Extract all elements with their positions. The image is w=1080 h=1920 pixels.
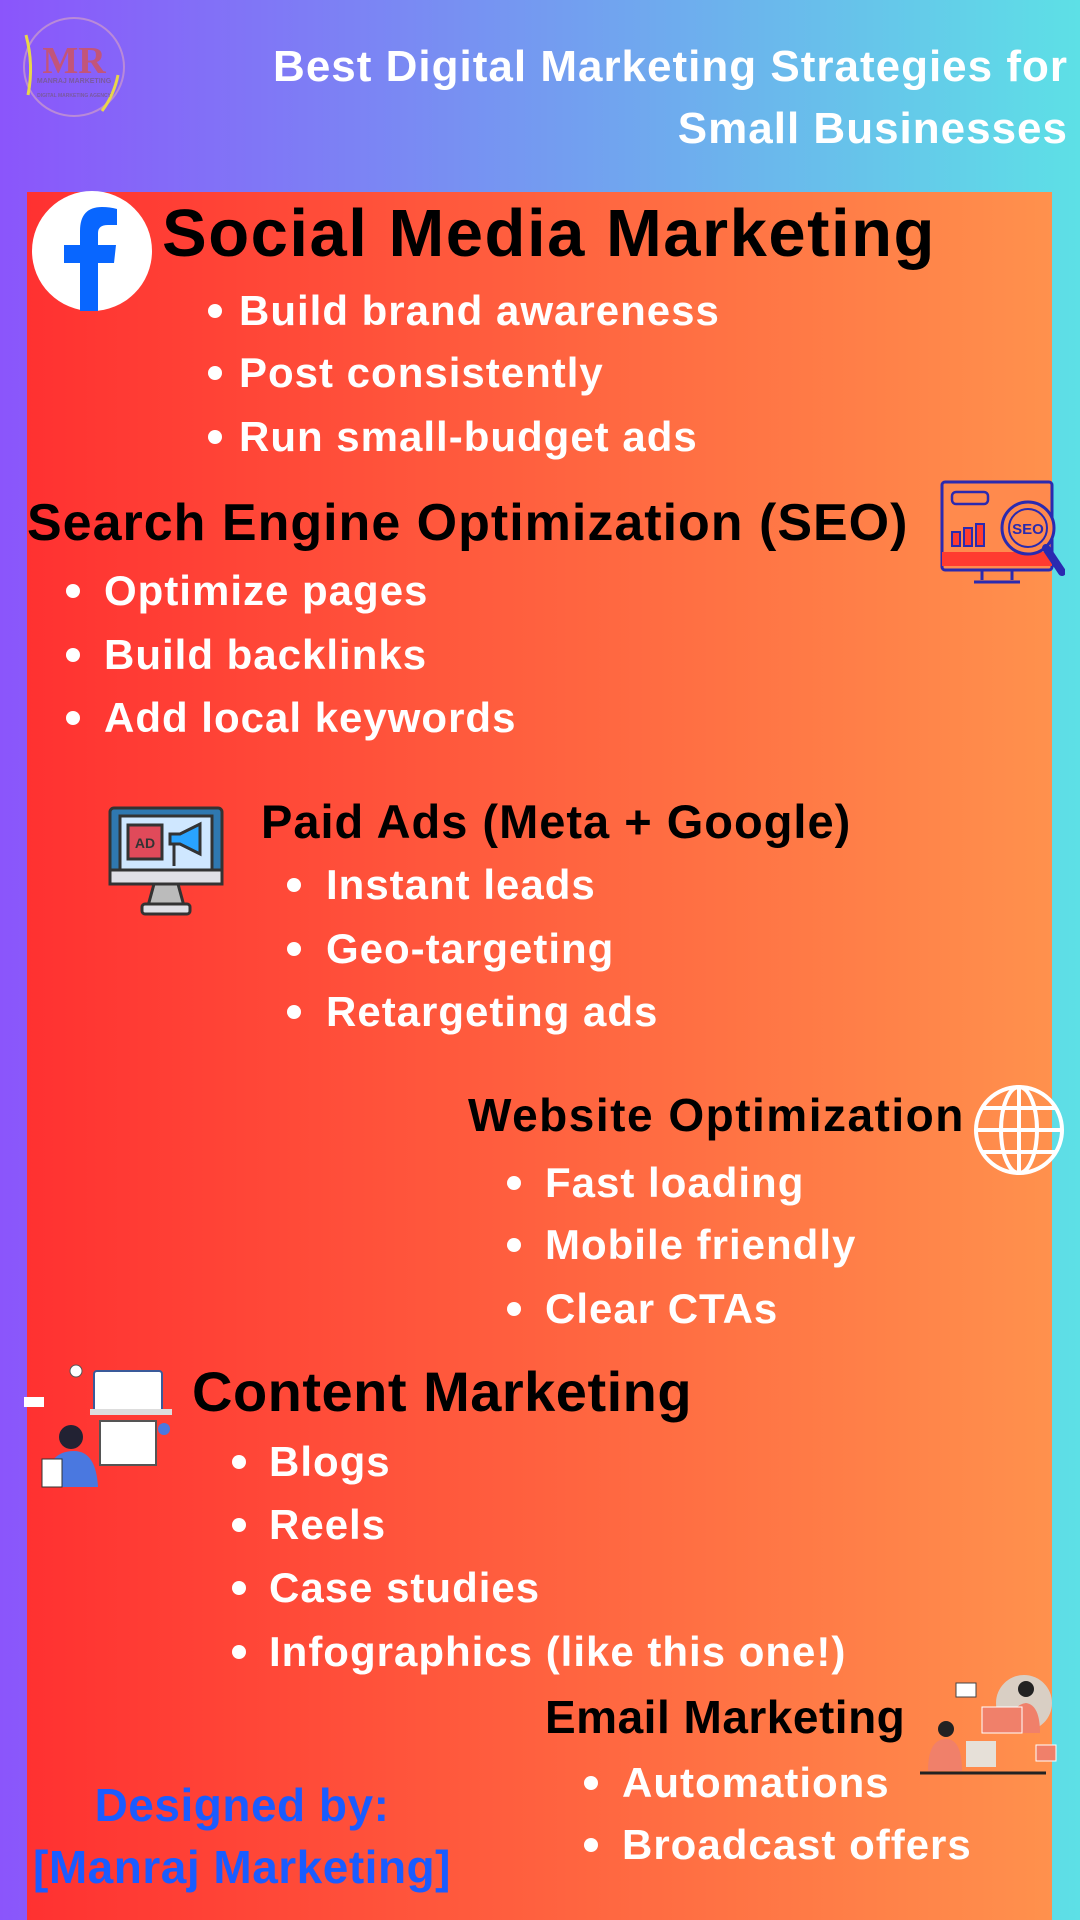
- list: content: Blogs: [269, 1438, 391, 1485]
- list: social media: Run small-budget ads: [239, 413, 698, 460]
- list: website: Mobile friendly: [545, 1221, 856, 1268]
- logo: DIGITAL MARKETING AGENCY: [37, 93, 112, 99]
- list: content: [232, 1438, 846, 1675]
- title: Small Businesses: [678, 104, 1068, 153]
- logo: MANRAJ MARKETING: [37, 78, 112, 85]
- list: email: Automations: [622, 1759, 890, 1806]
- heading: paid ads: Paid Ads (Meta + Google): [261, 795, 851, 848]
- list: email: [584, 1759, 972, 1868]
- list: SEO: Add local keywords: [104, 694, 516, 741]
- list: SEO: [66, 567, 516, 741]
- title: [273, 42, 1068, 153]
- list: content: Infographics (like this one!): [269, 1628, 846, 1675]
- icon: ad monitor: AD: [135, 835, 155, 851]
- icon: facebook: [32, 191, 152, 311]
- list: social media: [208, 287, 720, 460]
- list: paid ads: [287, 861, 658, 1035]
- logo: [23, 17, 125, 117]
- list: website: Clear CTAs: [545, 1285, 778, 1332]
- heading: social media marketing: Social Media Marketing: [162, 196, 936, 271]
- icon: SEO monitor: [940, 480, 1065, 584]
- list: paid ads: Retargeting ads: [326, 988, 658, 1035]
- list: SEO: Optimize pages: [104, 567, 428, 614]
- list: paid ads: Geo-targeting: [326, 925, 614, 972]
- list: content: Case studies: [269, 1564, 540, 1611]
- list: paid ads: Instant leads: [326, 861, 596, 908]
- logo: MR: [42, 40, 106, 82]
- credit: designed by: [33, 1779, 451, 1893]
- icon: ad monitor: [108, 806, 224, 916]
- icon: globe: [974, 1085, 1064, 1175]
- list: email: Broadcast offers: [622, 1821, 972, 1868]
- list: SEO: Build backlinks: [104, 631, 427, 678]
- title: Best Digital Marketing Strategies for: [273, 42, 1068, 91]
- list: website: Fast loading: [545, 1159, 804, 1206]
- heading: email marketing: Email Marketing: [545, 1691, 905, 1743]
- icon: content illustration: [24, 1364, 172, 1488]
- heading: website optimization: Website Optimization: [468, 1089, 965, 1141]
- icon: SEO monitor: SEO: [1012, 521, 1044, 538]
- heading: content marketing: Content Marketing: [192, 1360, 692, 1423]
- list: social media: Post consistently: [239, 349, 604, 396]
- icon: email illustration: [920, 1675, 1056, 1774]
- credit: designed by: Designed by:: [95, 1779, 389, 1831]
- credit: designed by: [Manraj Marketing]: [33, 1841, 451, 1893]
- list: social media: Build brand awareness: [239, 287, 720, 334]
- list: content: Reels: [269, 1501, 386, 1548]
- heading: SEO: Search Engine Optimization (SEO): [27, 494, 908, 552]
- list: website: [507, 1159, 856, 1332]
